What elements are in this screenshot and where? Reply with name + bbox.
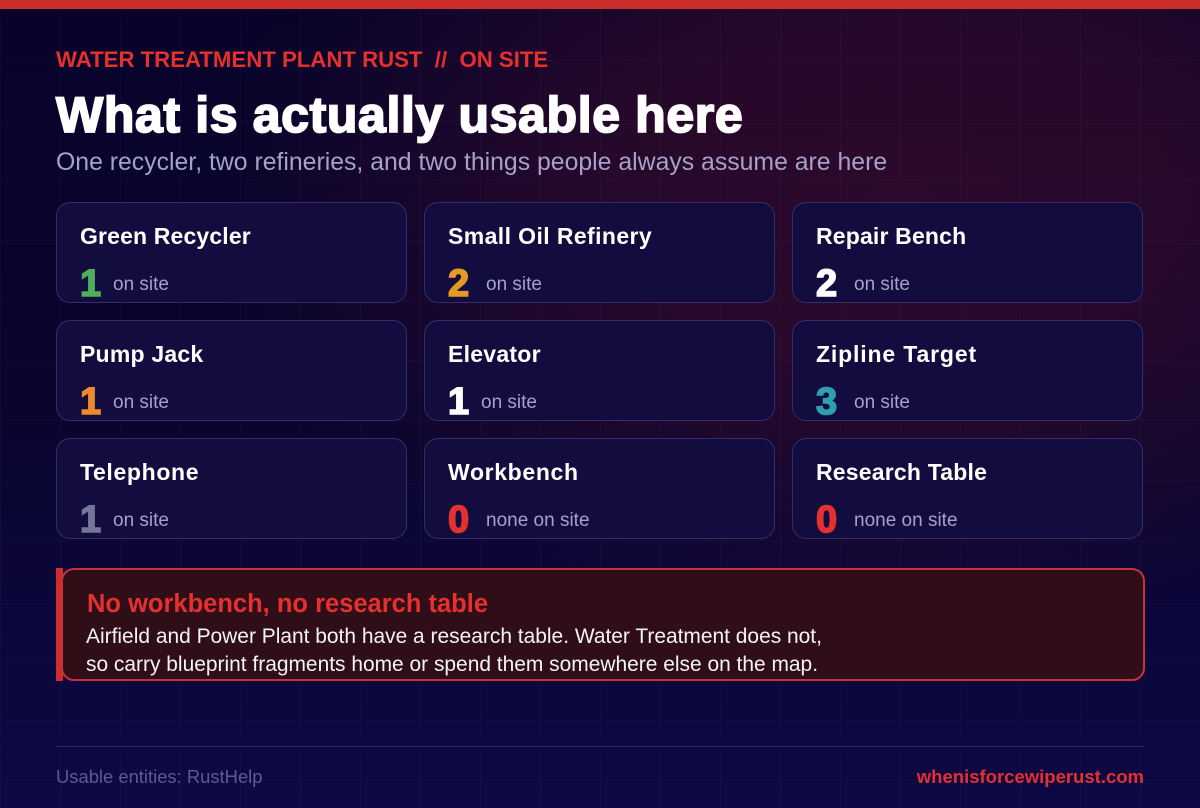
callout body	[86, 625, 822, 676]
card: Zipline Target	[792, 320, 1143, 421]
footer site link text: whenisforcewiperust.com	[917, 766, 1144, 787]
callout body: Airfield and Power Plant both have a research table. Water Treatment does not,	[86, 625, 822, 648]
footer source: Usable entities: RustHelp	[56, 766, 262, 787]
card: Small Oil Refinery: Small Oil Refinery	[448, 223, 652, 249]
callout body: so carry blueprint fragments home or spend them somewhere else on the map.	[86, 653, 818, 676]
eyebrow heading: WATER TREATMENT PLANT RUST // ON SITE	[56, 47, 548, 72]
card: Small Oil Refinery: on site	[486, 274, 542, 294]
card: Workbench	[424, 438, 775, 539]
card: Elevator: on site	[481, 392, 537, 412]
card: Green Recycler: Green Recycler	[80, 223, 251, 249]
callout box	[61, 568, 1145, 681]
card: Pump Jack: Pump Jack	[80, 341, 203, 367]
card: Elevator	[424, 320, 775, 421]
card: Zipline Target: Zipline Target	[816, 341, 977, 367]
callout left bar	[56, 568, 63, 681]
card: Repair Bench: on site	[854, 274, 910, 294]
callout heading: No workbench, no research table	[87, 590, 488, 618]
card: Workbench: Workbench	[448, 459, 579, 485]
subtitle: One recycler, two refineries, and two things people always assume are here	[56, 149, 887, 176]
card: Repair Bench	[792, 202, 1143, 303]
card: Elevator: Elevator	[448, 341, 541, 367]
card: Zipline Target: on site	[854, 392, 910, 412]
card: Research Table	[792, 438, 1143, 539]
callout: no workbench, no research table	[56, 568, 1145, 681]
card: Small Oil Refinery	[424, 202, 775, 303]
card: Pump Jack: on site	[113, 392, 169, 412]
title: What is actually usable here	[56, 87, 743, 143]
top accent bar	[0, 0, 1200, 9]
card: Green Recycler: on site	[113, 274, 169, 294]
card: Repair Bench: Repair Bench	[816, 223, 966, 249]
card: Research Table: none on site	[854, 510, 958, 530]
card: Research Table: Research Table	[816, 459, 987, 485]
card: Telephone	[56, 438, 407, 539]
card: Workbench: none on site	[486, 510, 590, 530]
card: Telephone: on site	[113, 510, 169, 530]
footer rule	[56, 746, 1145, 747]
card: Pump Jack	[56, 320, 407, 421]
card: Green Recycler	[56, 202, 407, 303]
card: Telephone: Telephone	[80, 459, 199, 485]
